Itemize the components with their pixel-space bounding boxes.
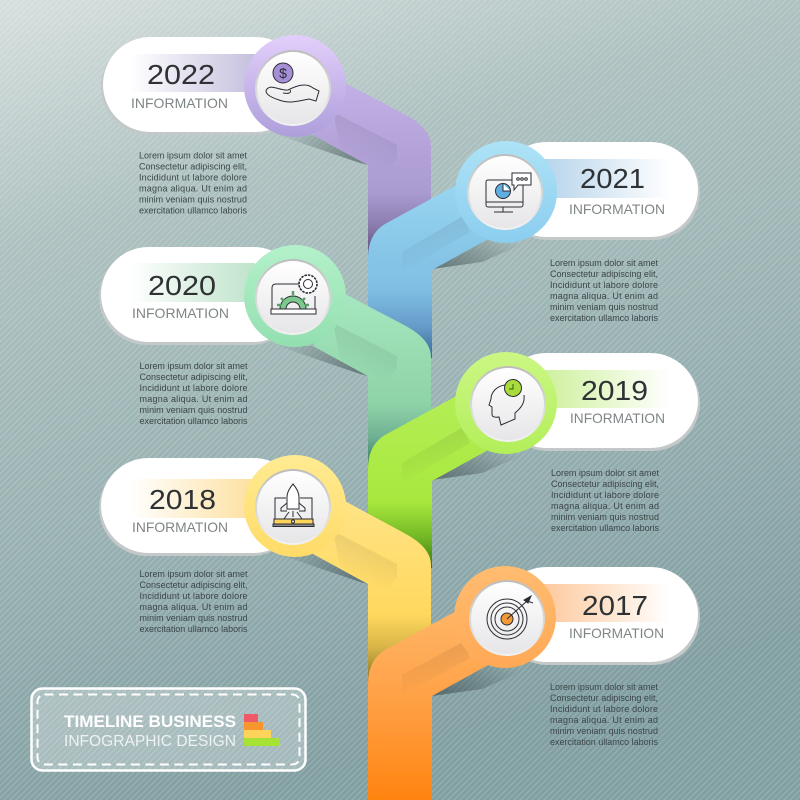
text block: 2018: Consectetur adipiscing elit, [140,580,248,590]
year: 2018: 2018 [149,484,216,515]
text block: 2018 [140,569,248,634]
icon: monitor with chart [486,173,531,212]
text block: 2022: exercitation ullamco laboris [139,206,248,216]
panel: 2020 [99,245,431,473]
text block: 2022: magna aliqua. Ut enim ad [139,184,247,194]
text block: 2017: Incididunt ut labore dolore [550,704,658,714]
text block: 2020: exercitation ullamco laboris [140,416,248,426]
text block: 2022: Incididunt ut labore dolore [139,172,247,182]
text block: 2018: magna aliqua. Ut enim ad [140,602,248,612]
text block: 2018: Incididunt ut labore dolore [140,591,248,601]
text block: 2021: Incididunt ut labore dolore [550,280,658,290]
icon: laptop with gears [271,275,317,314]
ring: 2017 [454,566,556,668]
text block: 2018: minim veniam quis nostrud [140,613,248,623]
icon: target with arrow [487,596,533,639]
text block: 2021: exercitation ullamco laboris [550,313,658,323]
text block: 2019: Lorem ipsum dolor sit amet [551,468,659,478]
text block: 2018: exercitation ullamco laboris [140,624,248,634]
text block: 2017: magna aliqua. Ut enim ad [550,715,658,725]
label: information 2018: INFORMATION [132,519,228,535]
panel: 2019 [368,352,700,568]
icon: hand holding coin: $ [279,65,287,81]
panel: 2021 [368,141,700,358]
text block: 2017 [550,682,658,747]
title line 2: INFOGRAPHIC DESIGN [64,733,236,750]
arm: 2021 [368,183,490,358]
title line 1: TIMELINE BUSINESS [64,712,236,731]
text block: 2022: Consectetur adipiscing elit, [139,162,247,172]
text block: 2020: Incididunt ut labore dolore [140,383,248,393]
text block: 2021: magna aliqua. Ut enim ad [550,291,658,301]
ring: 2019 [455,352,557,454]
arm: 2020 [313,293,431,473]
text block: 2019: minim veniam quis nostrud [551,512,659,522]
text block: 2022: minim veniam quis nostrud [139,194,247,204]
text block: 2019 [551,468,660,533]
text block: 2019: Incididunt ut labore dolore [551,490,659,500]
text block: 2018: Lorem ipsum dolor sit amet [140,569,248,579]
label: information 2022: INFORMATION [131,95,228,111]
text block: 2020: Consectetur adipiscing elit, [140,372,248,382]
year: 2017: 2017 [582,590,648,621]
text block: 2017: Consectetur adipiscing elit, [550,693,658,703]
text block: 2021 [550,258,658,323]
text block: 2019: magna aliqua. Ut enim ad [551,501,659,511]
panel: 2017 [368,566,700,800]
ring: 2021 [455,141,557,243]
label: information 2020: INFORMATION [132,305,229,321]
text block: 2021: Consectetur adipiscing elit, [550,269,658,279]
text block: 2020: minim veniam quis nostrud [140,405,248,415]
text block: 2021: Lorem ipsum dolor sit amet [550,258,658,268]
ring: 2020 [244,245,346,347]
icon: head with clock [489,380,524,425]
text block: 2022 [139,150,248,216]
text block: 2017: minim veniam quis nostrud [550,726,658,736]
icon: hand holding coin [266,63,319,102]
label: information 2017: INFORMATION [569,625,664,641]
ring: 2018 [244,455,346,557]
year: 2022: 2022 [147,59,215,90]
panel: 2022 [101,35,431,262]
title badge [32,688,306,770]
text block: 2017: Lorem ipsum dolor sit amet [550,682,658,692]
text block: 2020: magna aliqua. Ut enim ad [140,394,248,404]
text block: 2021: minim veniam quis nostrud [550,302,658,312]
arm: 2017 [368,609,490,800]
label: information 2021: INFORMATION [569,201,665,217]
ring: 2022 [244,35,346,137]
arm: 2019 [368,394,490,568]
text block: 2017: exercitation ullamco laboris [550,737,658,747]
year: 2021: 2021 [580,163,645,194]
text block: 2019: exercitation ullamco laboris [551,523,660,533]
text block: 2020: Lorem ipsum dolor sit amet [140,361,248,371]
arm: 2018 [313,500,431,684]
icon: rocket and laptop [273,484,314,526]
panel: 2018 [99,455,431,684]
year: 2019: 2019 [581,375,648,406]
text block: 2020 [140,361,248,426]
year: 2020: 2020 [148,270,216,301]
text block: 2022: Lorem ipsum dolor sit amet [139,150,247,160]
icon: colored steps [244,714,280,746]
arm: 2022 [313,82,431,262]
label: information 2019: INFORMATION [570,410,665,426]
text block: 2019: Consectetur adipiscing elit, [551,479,659,489]
